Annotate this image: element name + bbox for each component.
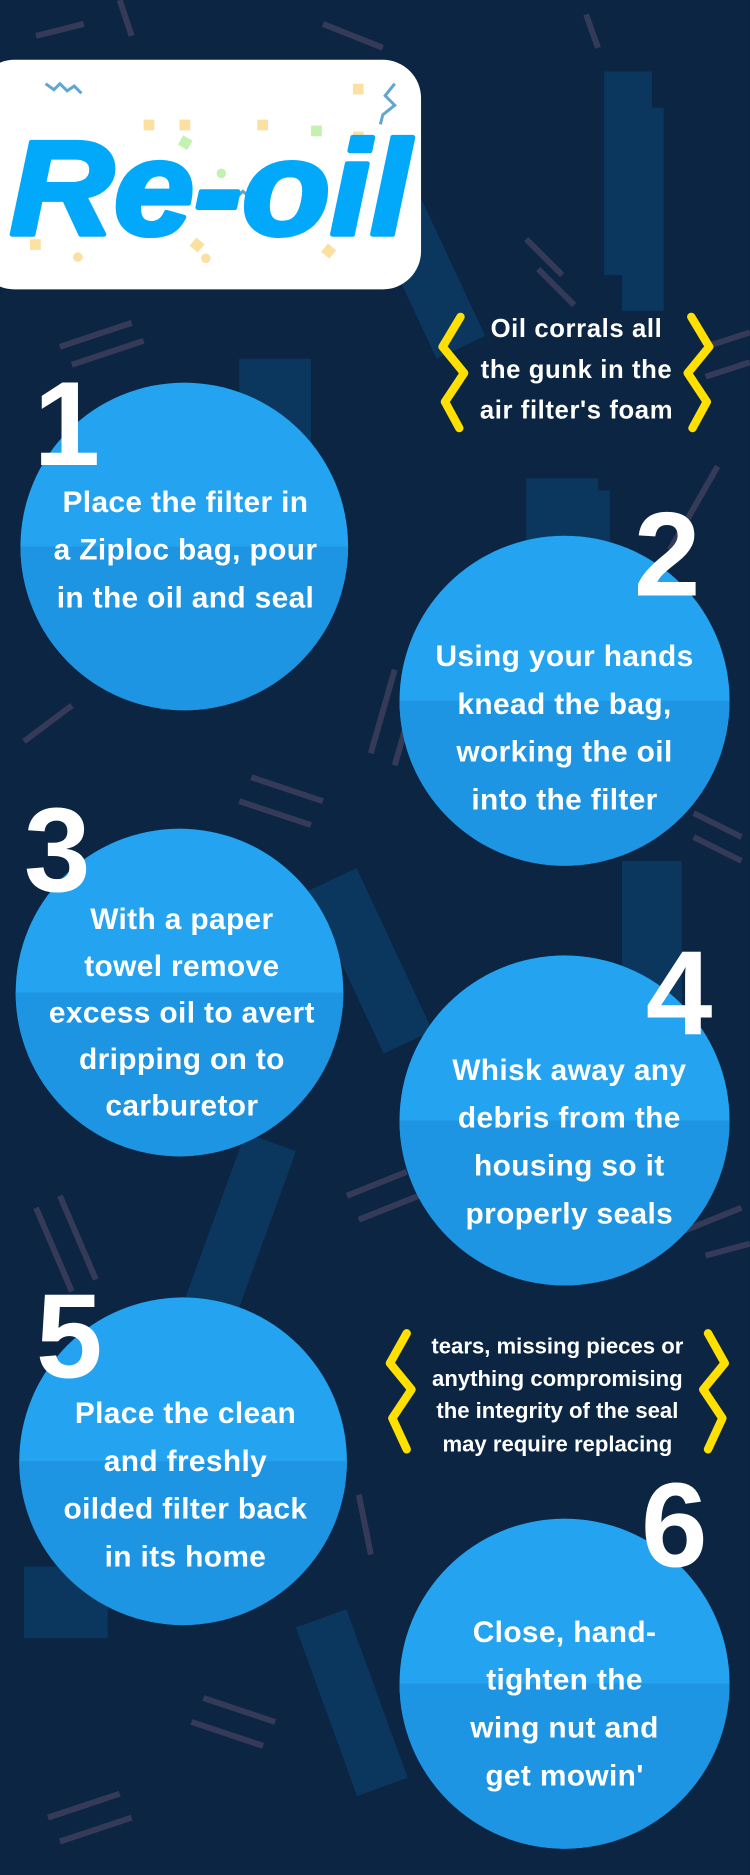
step 4: Whisk away any bbox=[452, 1054, 686, 1087]
step 3: With a paper bbox=[90, 903, 274, 936]
step 4 bbox=[400, 927, 730, 1285]
title: Re-oil bbox=[10, 114, 413, 263]
step 5: oilded filter back bbox=[64, 1493, 307, 1526]
callout: oil corrals bbox=[443, 315, 709, 428]
step 2: into the filter bbox=[471, 784, 658, 817]
step 3: carburetor bbox=[105, 1090, 258, 1123]
callout: oil corrals: air filter's foam bbox=[480, 397, 673, 425]
step 4: housing so it bbox=[474, 1149, 665, 1182]
step 5: 5 bbox=[36, 1271, 102, 1404]
step 2: 2 bbox=[634, 489, 700, 622]
title bbox=[0, 60, 421, 289]
step 1: Place the filter in bbox=[63, 486, 308, 519]
step 2: knead the bag, bbox=[457, 688, 672, 721]
step 2: Using your hands bbox=[436, 640, 694, 673]
callout: tears: tears, missing pieces or bbox=[431, 1334, 684, 1359]
step 1: in the oil and seal bbox=[57, 581, 314, 614]
callout: tears bbox=[390, 1333, 725, 1457]
step 1: 1 bbox=[34, 358, 100, 491]
step 3: dripping on to bbox=[79, 1043, 285, 1076]
step 1: a Ziploc bag, pour bbox=[54, 534, 317, 567]
step 6: tighten the bbox=[486, 1664, 643, 1697]
step 5: in its home bbox=[105, 1540, 266, 1573]
step 5: Place the clean bbox=[75, 1397, 296, 1430]
callout: oil corrals: Oil corrals all bbox=[491, 315, 662, 343]
step 4: properly seals bbox=[466, 1197, 673, 1230]
step 2: working the oil bbox=[455, 736, 673, 769]
callout: tears: anything compromising bbox=[432, 1366, 683, 1391]
step 4: debris from the bbox=[458, 1102, 681, 1135]
step 3: excess oil to avert bbox=[49, 996, 315, 1029]
step 5: and freshly bbox=[104, 1445, 267, 1478]
step 5 bbox=[19, 1271, 347, 1625]
step 2 bbox=[400, 489, 730, 866]
step 6: 6 bbox=[641, 1459, 708, 1592]
step 6: wing nut and bbox=[469, 1711, 659, 1744]
callout: oil corrals: the gunk in the bbox=[481, 356, 672, 384]
step 6 bbox=[400, 1459, 730, 1849]
callout: tears: the integrity of the seal bbox=[436, 1398, 678, 1423]
step 4: 4 bbox=[646, 927, 712, 1060]
step 6: Close, hand- bbox=[473, 1616, 656, 1649]
step 3 bbox=[16, 784, 343, 1156]
step 6: get mowin' bbox=[485, 1759, 644, 1792]
step 1 bbox=[20, 358, 348, 710]
callout: tears: may require replacing bbox=[442, 1432, 672, 1457]
step 3: 3 bbox=[24, 784, 91, 917]
step 3: towel remove bbox=[84, 950, 280, 983]
